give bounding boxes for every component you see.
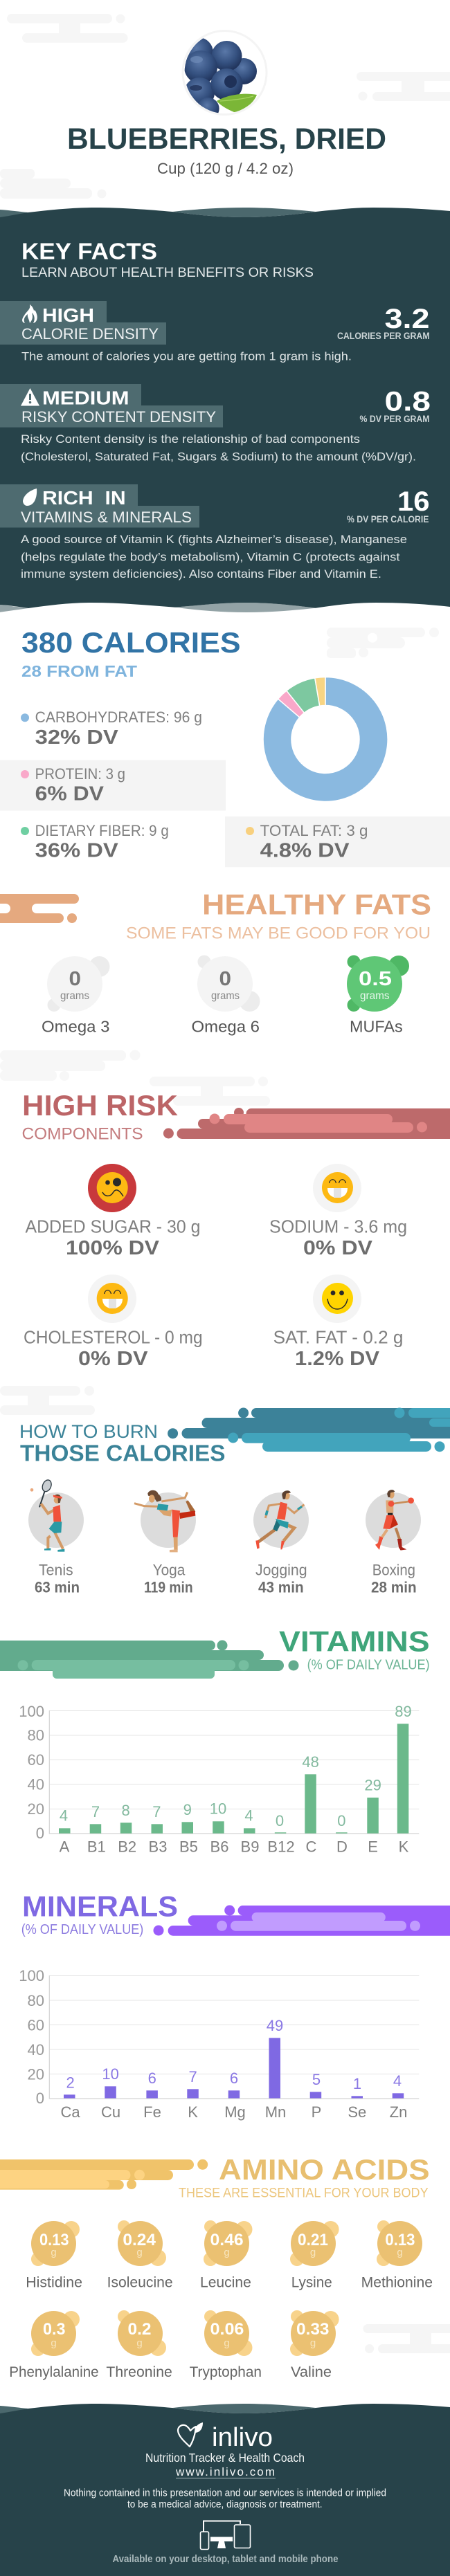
legend: dietary fiber: DIETARY FIBER: 9 g xyxy=(35,822,169,839)
amino acid: methionine: g xyxy=(397,2247,403,2258)
figure: tennis player xyxy=(30,1479,64,1552)
dark footer background xyxy=(0,2404,450,2576)
unit: CALORIES PER GRAM xyxy=(337,331,430,341)
value labels: 7 xyxy=(152,1803,161,1820)
value labels: 4 xyxy=(60,1807,68,1825)
fact: risky content density xyxy=(0,384,431,463)
subheading: SOME FATS MAY BE GOOD FOR YOU xyxy=(126,924,431,943)
activity: tennis: Tenis xyxy=(39,1562,73,1579)
heading: key facts: KEY FACTS xyxy=(21,238,157,264)
subheading: components: COMPONENTS xyxy=(22,1125,143,1144)
category labels: B2 xyxy=(118,1838,136,1856)
serving size: Cup (120 g / 4.2 oz) xyxy=(157,160,294,177)
category labels: B12 xyxy=(267,1838,295,1856)
category labels: B1 xyxy=(87,1838,106,1856)
amino acid: methionine: 0.13 xyxy=(385,2231,415,2249)
amino acid: tryptophan: 0.06 xyxy=(210,2320,244,2339)
description: Risky Content density is the relationship of bad components xyxy=(21,432,360,446)
heading: vitamins: VITAMINS xyxy=(279,1625,430,1658)
wave decoration: footer highlights xyxy=(0,2404,316,2415)
category labels: A xyxy=(60,1838,70,1856)
stat: omega 6 xyxy=(191,955,260,1036)
value labels: 29 xyxy=(364,1777,381,1794)
stat: omega 3 xyxy=(42,956,109,1036)
risk item: added sugar: ADDED SUGAR - 30 g xyxy=(25,1216,200,1237)
background cloud decoration xyxy=(363,2324,450,2353)
value labels: 6 xyxy=(230,2070,238,2087)
amino acid: isoleucine: 0.24 xyxy=(123,2231,156,2249)
bars xyxy=(59,1724,408,1834)
category labels: Fe xyxy=(143,2103,161,2121)
stat: omega 3: Omega 3 xyxy=(42,1018,109,1036)
legend: carbohydrates: CARBOHYDRATES: 96 g xyxy=(35,709,202,726)
heading: how to burn: HOW TO BURN xyxy=(19,1421,158,1442)
risk item: sodium: 0% DV xyxy=(303,1237,373,1259)
y axis labels: 60 xyxy=(28,1751,44,1769)
label band xyxy=(0,384,223,428)
category labels: Cu xyxy=(101,2103,120,2121)
category labels: Zn xyxy=(390,2103,407,2121)
stat: MUFAs: grams xyxy=(360,990,390,1002)
background cloud decoration: top left xyxy=(7,14,127,43)
stat: MUFAs xyxy=(347,955,409,1036)
amino acid: isoleucine: Isoleucine xyxy=(107,2274,173,2290)
value: 0.8 xyxy=(385,386,431,417)
y axis labels: 100 xyxy=(19,1967,44,1984)
stat: omega 6: Omega 6 xyxy=(191,1018,260,1036)
legend: carbohydrates xyxy=(21,709,202,749)
label: CALORIE DENSITY xyxy=(21,325,159,342)
amino acid: phenylalanine: 0.3 xyxy=(43,2320,65,2339)
unit: % DV PER GRAM xyxy=(360,414,429,424)
activity: tennis: 63 min xyxy=(35,1579,80,1596)
icon: desktop, tablet and phone xyxy=(201,2521,251,2549)
header decoration xyxy=(0,894,79,923)
amino acid: histidine: g xyxy=(51,2247,57,2258)
stat: MUFAs: 0.5 xyxy=(359,968,392,990)
description: The amount of calories you are getting from 1 gram is high. xyxy=(21,350,352,363)
amino acid: phenylalanine: Phenylalanine xyxy=(9,2364,99,2380)
label: VITAMINS & MINERALS xyxy=(21,509,192,526)
activity: yoga xyxy=(134,1490,196,1596)
background cloud decoration xyxy=(327,628,439,658)
category labels: E xyxy=(368,1838,378,1856)
y axis labels: 0 xyxy=(36,1825,44,1842)
description: (Cholesterol, Saturated Fat, Sugars & Sodium) to the amount (%DV/gr). xyxy=(21,450,416,463)
amino acid: leucine: Leucine xyxy=(200,2274,251,2290)
y axis labels: 20 xyxy=(28,1800,44,1818)
value labels: 0 xyxy=(337,1812,346,1829)
risk item: sodium: SODIUM - 3.6 mg xyxy=(269,1216,407,1237)
panel: amino acids xyxy=(0,2153,450,2380)
figure: boxer xyxy=(375,1490,414,1551)
legend: total fat: 4.8% DV xyxy=(260,840,350,862)
activity: boxing: Boxing xyxy=(372,1562,415,1579)
y axis labels: 40 xyxy=(28,2041,44,2058)
value labels: 48 xyxy=(302,1753,319,1771)
amino acid: threonine: Threonine xyxy=(106,2364,172,2380)
heading: high risk: HIGH RISK xyxy=(22,1089,178,1122)
y axis labels: 80 xyxy=(28,1727,44,1744)
label band xyxy=(0,301,166,345)
bar chart: vitamins xyxy=(19,1703,419,1856)
legend: carbohydrates: 32% DV xyxy=(35,727,119,749)
amino acid: valine xyxy=(290,2310,339,2380)
subheading: percent of daily value: (% OF DAILY VALUE) xyxy=(307,1658,430,1673)
description: immune system deficiencies). Also contains Fiber and Vitamin E. xyxy=(21,567,381,581)
panel: calories xyxy=(0,626,450,867)
header decoration xyxy=(0,2159,208,2190)
legend: protein: PROTEIN: 3 g xyxy=(35,765,125,783)
header decoration xyxy=(0,1640,299,1679)
category labels: B6 xyxy=(210,1838,228,1856)
amino acid: threonine: g xyxy=(136,2337,143,2349)
value labels: 0 xyxy=(276,1812,284,1829)
category labels: Mg xyxy=(224,2103,246,2121)
y axis labels xyxy=(19,1703,44,1842)
logo: inlivo xyxy=(178,2422,273,2452)
amino acid: leucine xyxy=(200,2220,252,2290)
amino acid: tryptophan: g xyxy=(224,2337,230,2349)
panel: minerals xyxy=(19,1890,450,2121)
value labels: 4 xyxy=(393,2072,402,2090)
heading: healthy fats: HEALTHY FATS xyxy=(202,888,431,921)
title: BLUEBERRIES, DRIED xyxy=(67,122,386,156)
legend: dietary fiber xyxy=(21,822,169,862)
stat: omega 3: 0 xyxy=(69,968,81,990)
activity: tennis xyxy=(28,1479,84,1596)
category labels: K xyxy=(399,1838,409,1856)
subheading: LEARN ABOUT HEALTH BENEFITS OR RISKS xyxy=(21,265,314,280)
amino acid: methionine: Methionine xyxy=(361,2274,433,2290)
disclaimer: Nothing contained in this presentation and our services is intended or implied xyxy=(64,2487,386,2499)
rating: rich in: RICH IN xyxy=(42,487,126,509)
stat: omega 3: grams xyxy=(60,990,89,1002)
wave decoration: top highlights xyxy=(0,208,316,219)
value labels: 7 xyxy=(91,1803,100,1820)
label: RISKY CONTENT DENSITY xyxy=(21,408,216,426)
bars xyxy=(64,2038,404,2098)
category labels: P xyxy=(312,2103,321,2121)
activity: yoga: Yoga xyxy=(153,1562,186,1579)
panel: high risk components xyxy=(0,1050,450,1370)
gridlines xyxy=(49,1976,419,2074)
disclaimer: to be a medical advice, diagnosis or treatment. xyxy=(127,2499,323,2510)
value labels: 8 xyxy=(121,1802,130,1819)
amino acid: methionine xyxy=(361,2220,433,2290)
background cloud decoration: lower left xyxy=(0,169,107,199)
category labels: B5 xyxy=(179,1838,198,1856)
legend: total fat xyxy=(225,816,450,867)
amino acid: histidine: Histidine xyxy=(26,2274,82,2290)
y axis labels: 100 xyxy=(19,1703,44,1720)
figure: runner xyxy=(255,1490,304,1549)
activity: yoga: 119 min xyxy=(144,1579,193,1596)
icon: flame xyxy=(22,304,37,323)
category labels: K xyxy=(188,2103,198,2121)
amino acid: lysine: Lysine xyxy=(291,2274,332,2290)
amino acid: valine: 0.33 xyxy=(296,2320,330,2339)
gridlines xyxy=(49,1710,419,1809)
amino acid: lysine: 0.21 xyxy=(298,2231,328,2249)
label band xyxy=(0,484,199,527)
donut chart: macronutrients xyxy=(263,677,388,801)
risk item: added sugar: 100% DV xyxy=(66,1237,160,1259)
icon: heart with leaf xyxy=(178,2422,203,2447)
y axis labels: 20 xyxy=(28,2065,44,2083)
category labels xyxy=(61,2103,407,2121)
subheading: percent of daily value: (% OF DAILY VALUE) xyxy=(21,1922,143,1937)
value: 3.2 xyxy=(385,304,429,334)
panel: how to burn those calories xyxy=(0,1386,450,1596)
category labels: B9 xyxy=(241,1838,259,1856)
category labels: C xyxy=(305,1838,316,1856)
background cloud decoration: top right xyxy=(357,72,450,101)
rating: medium: MEDIUM xyxy=(42,387,129,408)
food photo: blueberries xyxy=(183,30,267,120)
figure: yoga pose xyxy=(134,1490,195,1552)
amino acid: lysine: g xyxy=(310,2247,316,2258)
activity: jogging: Jogging xyxy=(255,1562,307,1579)
amino acid: isoleucine xyxy=(107,2220,173,2290)
tagline: Nutrition Tracker & Health Coach xyxy=(145,2451,305,2465)
value: 16 xyxy=(397,486,430,517)
activity: boxing: 28 min xyxy=(371,1579,417,1596)
amino acid: tryptophan: Tryptophan xyxy=(190,2364,262,2380)
category labels: D xyxy=(336,1838,348,1856)
stat: MUFAs: MUFAs xyxy=(350,1018,403,1036)
heading: those calories: THOSE CALORIES xyxy=(20,1441,226,1466)
legend: dietary fiber: 36% DV xyxy=(35,840,119,862)
legend: protein xyxy=(0,760,226,811)
y axis labels: 40 xyxy=(28,1776,44,1793)
category labels: Mn xyxy=(265,2103,286,2121)
activity: jogging xyxy=(253,1490,309,1596)
panel: key facts xyxy=(0,208,450,612)
background cloud decoration xyxy=(0,1050,270,1106)
value labels: 6 xyxy=(148,2070,156,2087)
amino acid: tryptophan xyxy=(190,2310,262,2380)
risk item: saturated fat: 1.2% DV xyxy=(295,1348,380,1370)
category labels xyxy=(60,1838,409,1856)
category labels: Ca xyxy=(61,2103,80,2121)
value labels: 9 xyxy=(183,1801,192,1818)
amino acid: histidine xyxy=(26,2221,82,2290)
stat: omega 6: grams xyxy=(211,990,240,1002)
fact: calorie density xyxy=(0,301,430,363)
value labels: 7 xyxy=(188,2068,197,2085)
website link: www.inlivo.com xyxy=(175,2465,275,2478)
y axis labels: 60 xyxy=(28,2016,44,2034)
y axis labels: 80 xyxy=(28,1992,44,2009)
risk item: added sugar xyxy=(25,1164,200,1259)
amino acid: histidine: 0.13 xyxy=(39,2231,69,2249)
description: (helps regulate the body’s metabolism), Vitamin C (protects against xyxy=(21,550,400,563)
heading: minerals: MINERALS xyxy=(22,1890,178,1922)
value labels: 4 xyxy=(244,1807,253,1825)
risk item: saturated fat xyxy=(273,1275,403,1370)
icon: leaf xyxy=(23,488,37,506)
subheading: THESE ARE ESSENTIAL FOR YOUR BODY xyxy=(179,2186,429,2201)
value labels: 10 xyxy=(102,2065,119,2083)
amino acid: phenylalanine: g xyxy=(51,2337,57,2349)
amino acid: valine: g xyxy=(310,2337,316,2349)
amino acid: phenylalanine xyxy=(9,2311,99,2380)
description: A good source of Vitamin K (fights Alzheimer’s disease), Manganese xyxy=(21,533,407,546)
amino acid: threonine: 0.2 xyxy=(127,2320,151,2339)
activity: jogging: 43 min xyxy=(258,1579,304,1596)
value labels: 10 xyxy=(210,1800,226,1818)
availability note: Available on your desktop, tablet and mobile phone xyxy=(112,2554,338,2565)
risk item: cholesterol xyxy=(24,1275,203,1370)
y axis labels: 0 xyxy=(36,2090,44,2107)
value labels: 2 xyxy=(66,2074,75,2091)
value labels: 49 xyxy=(267,2017,283,2034)
value labels: 1 xyxy=(353,2075,361,2092)
value labels: 89 xyxy=(395,1703,412,1720)
amino acid: valine: Valine xyxy=(291,2364,332,2380)
risk item: saturated fat: SAT. FAT - 0.2 g xyxy=(273,1327,403,1348)
value labels xyxy=(60,1703,412,1829)
amino acid: threonine xyxy=(106,2310,172,2380)
unit: % DV PER CALORIE xyxy=(347,514,429,524)
heading: calories: 380 CALORIES xyxy=(21,626,241,659)
amino acid: leucine: 0.46 xyxy=(210,2231,244,2249)
stat: omega 6: 0 xyxy=(219,968,231,990)
category labels: B3 xyxy=(149,1838,167,1856)
wordmark: inlivo xyxy=(212,2423,273,2452)
risk item: sodium xyxy=(269,1164,407,1259)
description xyxy=(21,533,407,581)
panel: healthy fats xyxy=(0,888,431,1036)
background cloud decoration xyxy=(0,1386,95,1415)
icon: warning triangle xyxy=(21,388,39,405)
description xyxy=(21,432,416,463)
header decoration xyxy=(154,1906,450,1936)
wave decoration: bottom highlights xyxy=(0,603,316,612)
category labels: Se xyxy=(348,2103,366,2121)
amino acid: leucine: g xyxy=(224,2247,230,2258)
dark panel background xyxy=(0,208,450,608)
bar chart: minerals xyxy=(19,1967,419,2121)
amino acid: lysine xyxy=(290,2221,339,2290)
y axis labels xyxy=(19,1967,44,2107)
legend: total fat: TOTAL FAT: 3 g xyxy=(260,822,368,839)
subheading: from fat: 28 FROM FAT xyxy=(21,662,137,680)
value labels: 5 xyxy=(312,2071,321,2088)
header decoration xyxy=(163,1108,450,1139)
value labels xyxy=(66,2017,402,2092)
header decoration xyxy=(168,1407,450,1452)
amino acid: isoleucine: g xyxy=(136,2247,143,2258)
risk item: cholesterol: CHOLESTEROL - 0 mg xyxy=(24,1327,203,1348)
heading: amino acids: AMINO ACIDS xyxy=(219,2153,430,2186)
fact: rich in vitamins and minerals xyxy=(0,484,430,581)
legend: protein: 6% DV xyxy=(35,783,105,805)
panel: footer xyxy=(0,2404,450,2576)
disclaimer xyxy=(64,2487,386,2510)
panel: vitamins xyxy=(0,1625,430,1856)
rating: high: HIGH xyxy=(42,304,94,326)
risk item: cholesterol: 0% DV xyxy=(78,1348,148,1370)
activity: boxing xyxy=(366,1490,421,1596)
